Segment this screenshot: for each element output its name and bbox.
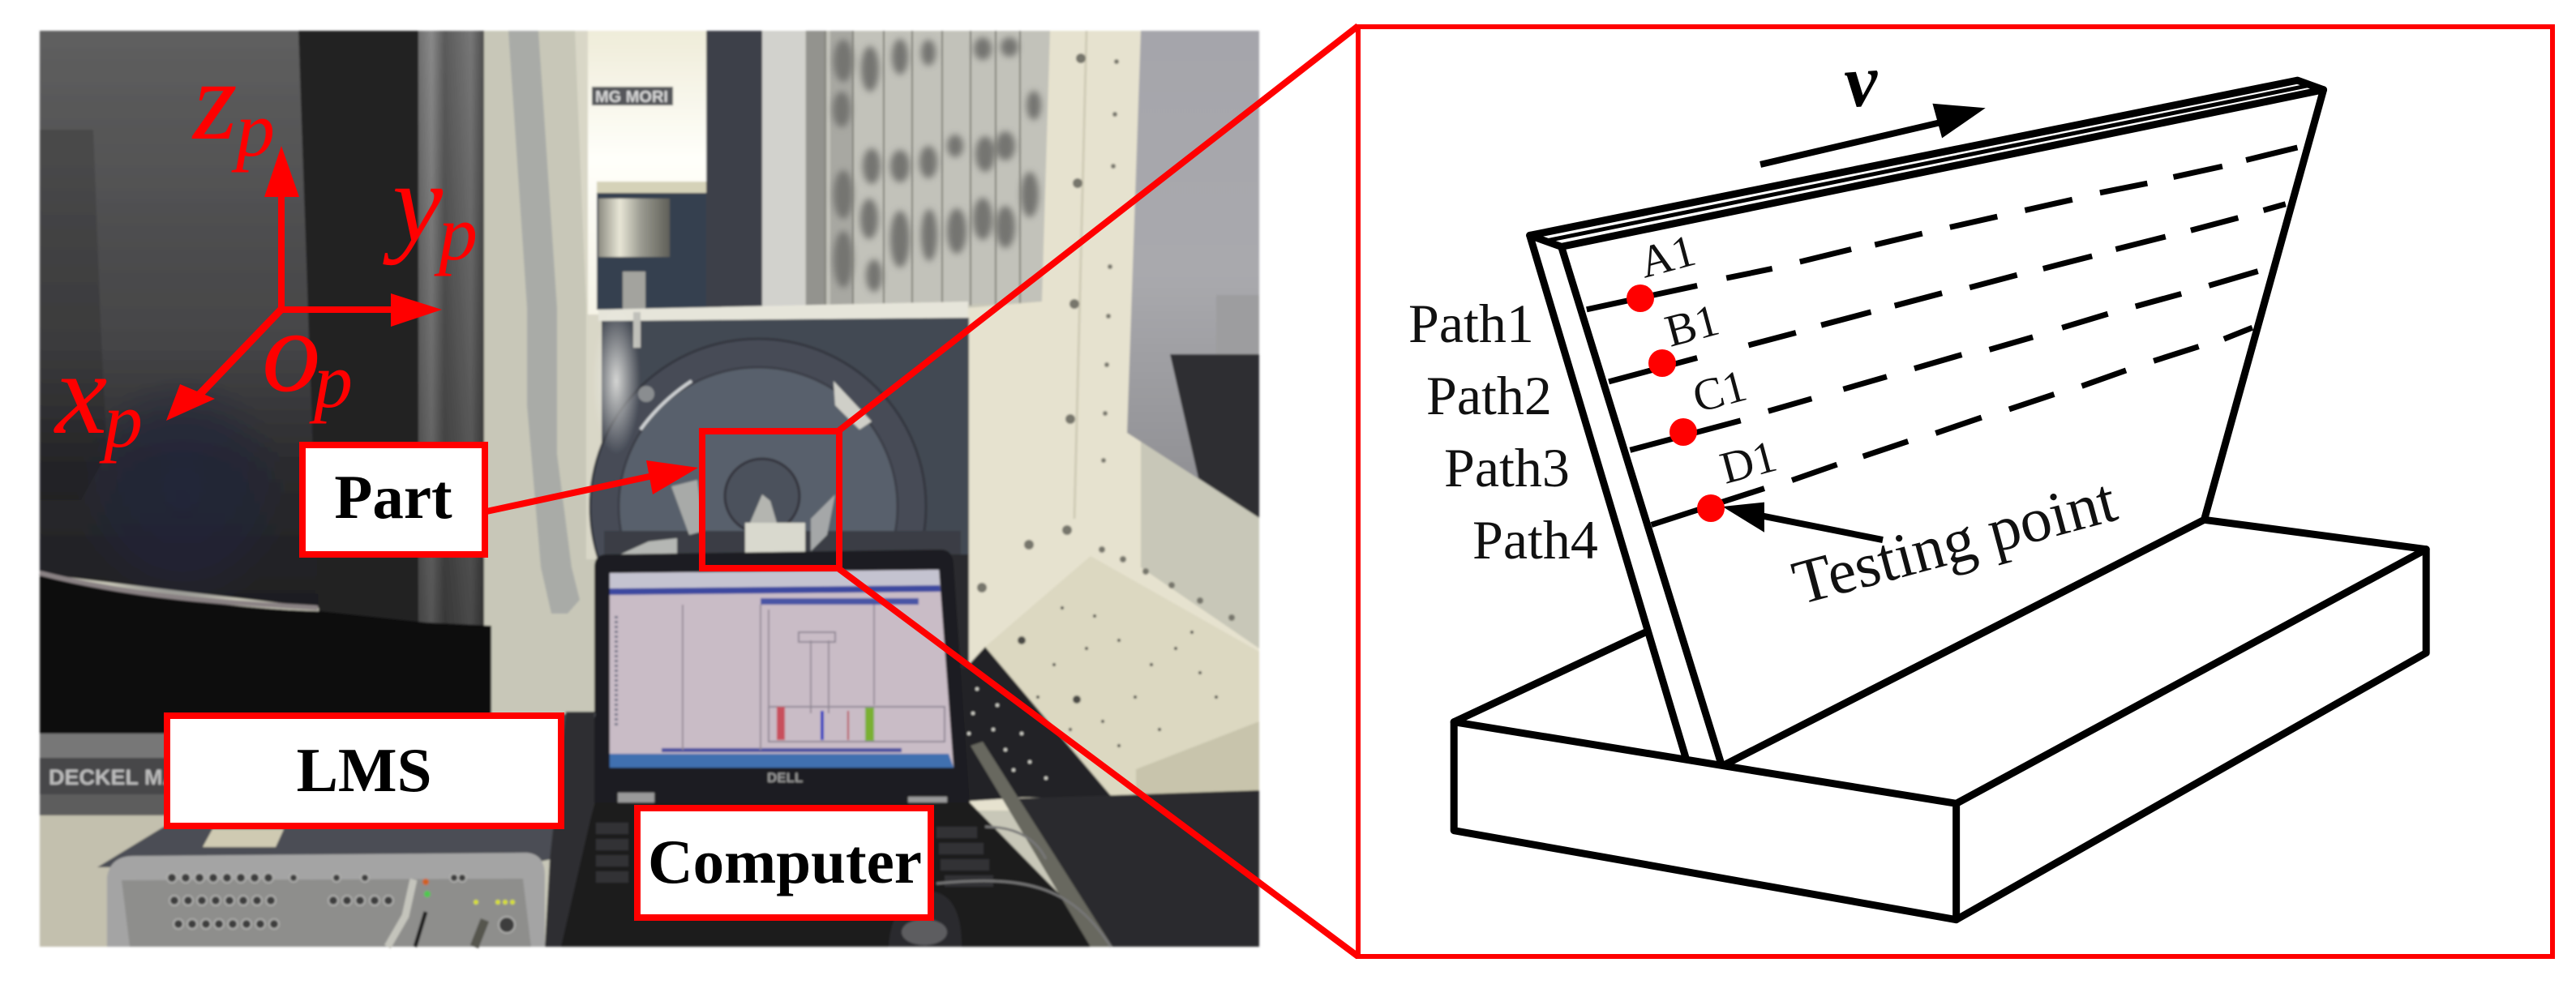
bright arc at lower left [620,538,677,554]
axis label: x: p [99,377,143,464]
point labels: D1 [1715,431,1781,494]
workpiece top [750,494,777,523]
door dark strip [298,31,420,631]
chips [967,687,1048,780]
silver rail [971,742,1112,947]
LMS device top [97,713,596,867]
label: Part: Part [334,462,452,532]
axis label: z: p [231,86,275,173]
hub [725,459,799,533]
panel: detail frame [1358,27,2552,956]
axis label: x [54,329,143,464]
LMS connectors [167,873,515,933]
laptop brand: DELL [767,770,803,785]
axis label: z: z [191,38,237,164]
testing point label: Testing point [1785,464,2124,618]
label: Computer [637,808,931,918]
mouse highlight [902,919,947,945]
fixture base [604,531,961,554]
floor speckles [1018,606,1218,747]
base block [1454,520,2426,920]
axis: z arrow [264,146,299,312]
testing point arrow [1722,503,1883,540]
axis: x arrow [166,307,284,421]
label: LMS: LMS [297,735,431,805]
LMS silver frame [107,853,545,947]
reflection on plate [834,381,872,430]
label: LMS [167,716,561,826]
mouse [889,892,962,947]
black chip tray [949,647,1112,802]
LMS front panel [122,879,531,947]
screen content [610,570,954,768]
point labels [1634,225,1781,494]
laptop screen [610,570,954,768]
lower black door area [40,574,491,734]
light grey panel [762,31,808,314]
panel: machine tool photo [40,31,1259,947]
point labels: A1 [1634,225,1700,289]
rotary ring [590,339,926,674]
axis label: x: x [54,329,107,459]
path labels: Path3 [1444,437,1570,498]
right window [1127,31,1259,518]
axis label: origin [262,287,353,424]
floor lower ledge [1136,721,1259,798]
testing points [1627,285,1725,522]
thin plate [1530,80,2324,763]
door frame shade [418,31,484,728]
beige floor lower left [40,815,202,947]
path 1 dashed [1587,148,2297,310]
beige wall right [967,31,1259,811]
louvre cover [805,31,1050,311]
workpiece [745,523,805,553]
reflections near part [671,480,704,535]
velocity arrow [1760,104,1986,165]
upper white spindle panel [588,31,709,314]
door darker left block [40,130,107,500]
velocity label: v [1841,38,1881,123]
LMS cables and LEDs [388,879,515,947]
spindle housing [597,182,710,312]
window pale reflection [1216,295,1259,354]
label: Computer: Computer [648,827,922,896]
axis label: origin: p [309,337,353,424]
point labels: B1 [1660,295,1724,357]
callout lines from part box to detail frame [839,26,1358,956]
arrow: part label to part [486,460,698,511]
path labels [1408,293,1598,571]
white ledge [598,302,968,321]
door edge highlight [40,573,318,608]
laptop lid [594,550,970,802]
path labels: Path2 [1426,365,1552,426]
door pillar columns [508,31,602,614]
strip beside fixture [949,554,969,668]
navy column [706,31,765,310]
machine door, left grey panel [40,31,319,608]
MG MORI plate [592,87,673,105]
floor slope panel [985,556,1259,798]
path 4 dashed [1652,327,2252,524]
glare on fixture [592,308,641,454]
axis label: y: p [434,190,478,276]
tool [633,312,641,348]
wall crease [1074,31,1087,519]
path labels: Path1 [1408,293,1534,354]
LMS side [545,712,594,947]
screw [638,386,654,402]
machine brand text: DECKEL MA [49,765,178,789]
keyboard keys [596,823,993,887]
dark tray box [1018,790,1259,947]
highlight on plate edge [641,381,692,430]
label: Part [302,445,485,554]
window dark reflection [1170,354,1259,518]
axis label: y: y [383,140,444,266]
door frame strip [418,31,484,728]
LMS sticker [203,829,284,847]
laptop keyboard deck [559,802,1111,947]
wall screws [977,53,1235,621]
door bands [40,734,202,815]
axis label: z [191,38,275,173]
laptop hinges [618,793,947,806]
point labels: C1 [1687,361,1751,423]
path 3 dashed [1630,272,2258,450]
diagram: workpiece line drawing [1454,80,2426,920]
axis label: origin: o [262,287,321,417]
path labels: Path4 [1472,509,1598,571]
navy reflection in door window [77,373,288,616]
axis label: y [383,140,478,276]
path 2 dashed [1609,204,2286,382]
rotary plate [619,367,898,646]
axis: y arrow [280,293,442,327]
brand label: MG MORI [595,88,668,106]
laptop cable [937,827,1111,947]
fixture navy backing [602,318,969,558]
region box around part [702,431,839,568]
